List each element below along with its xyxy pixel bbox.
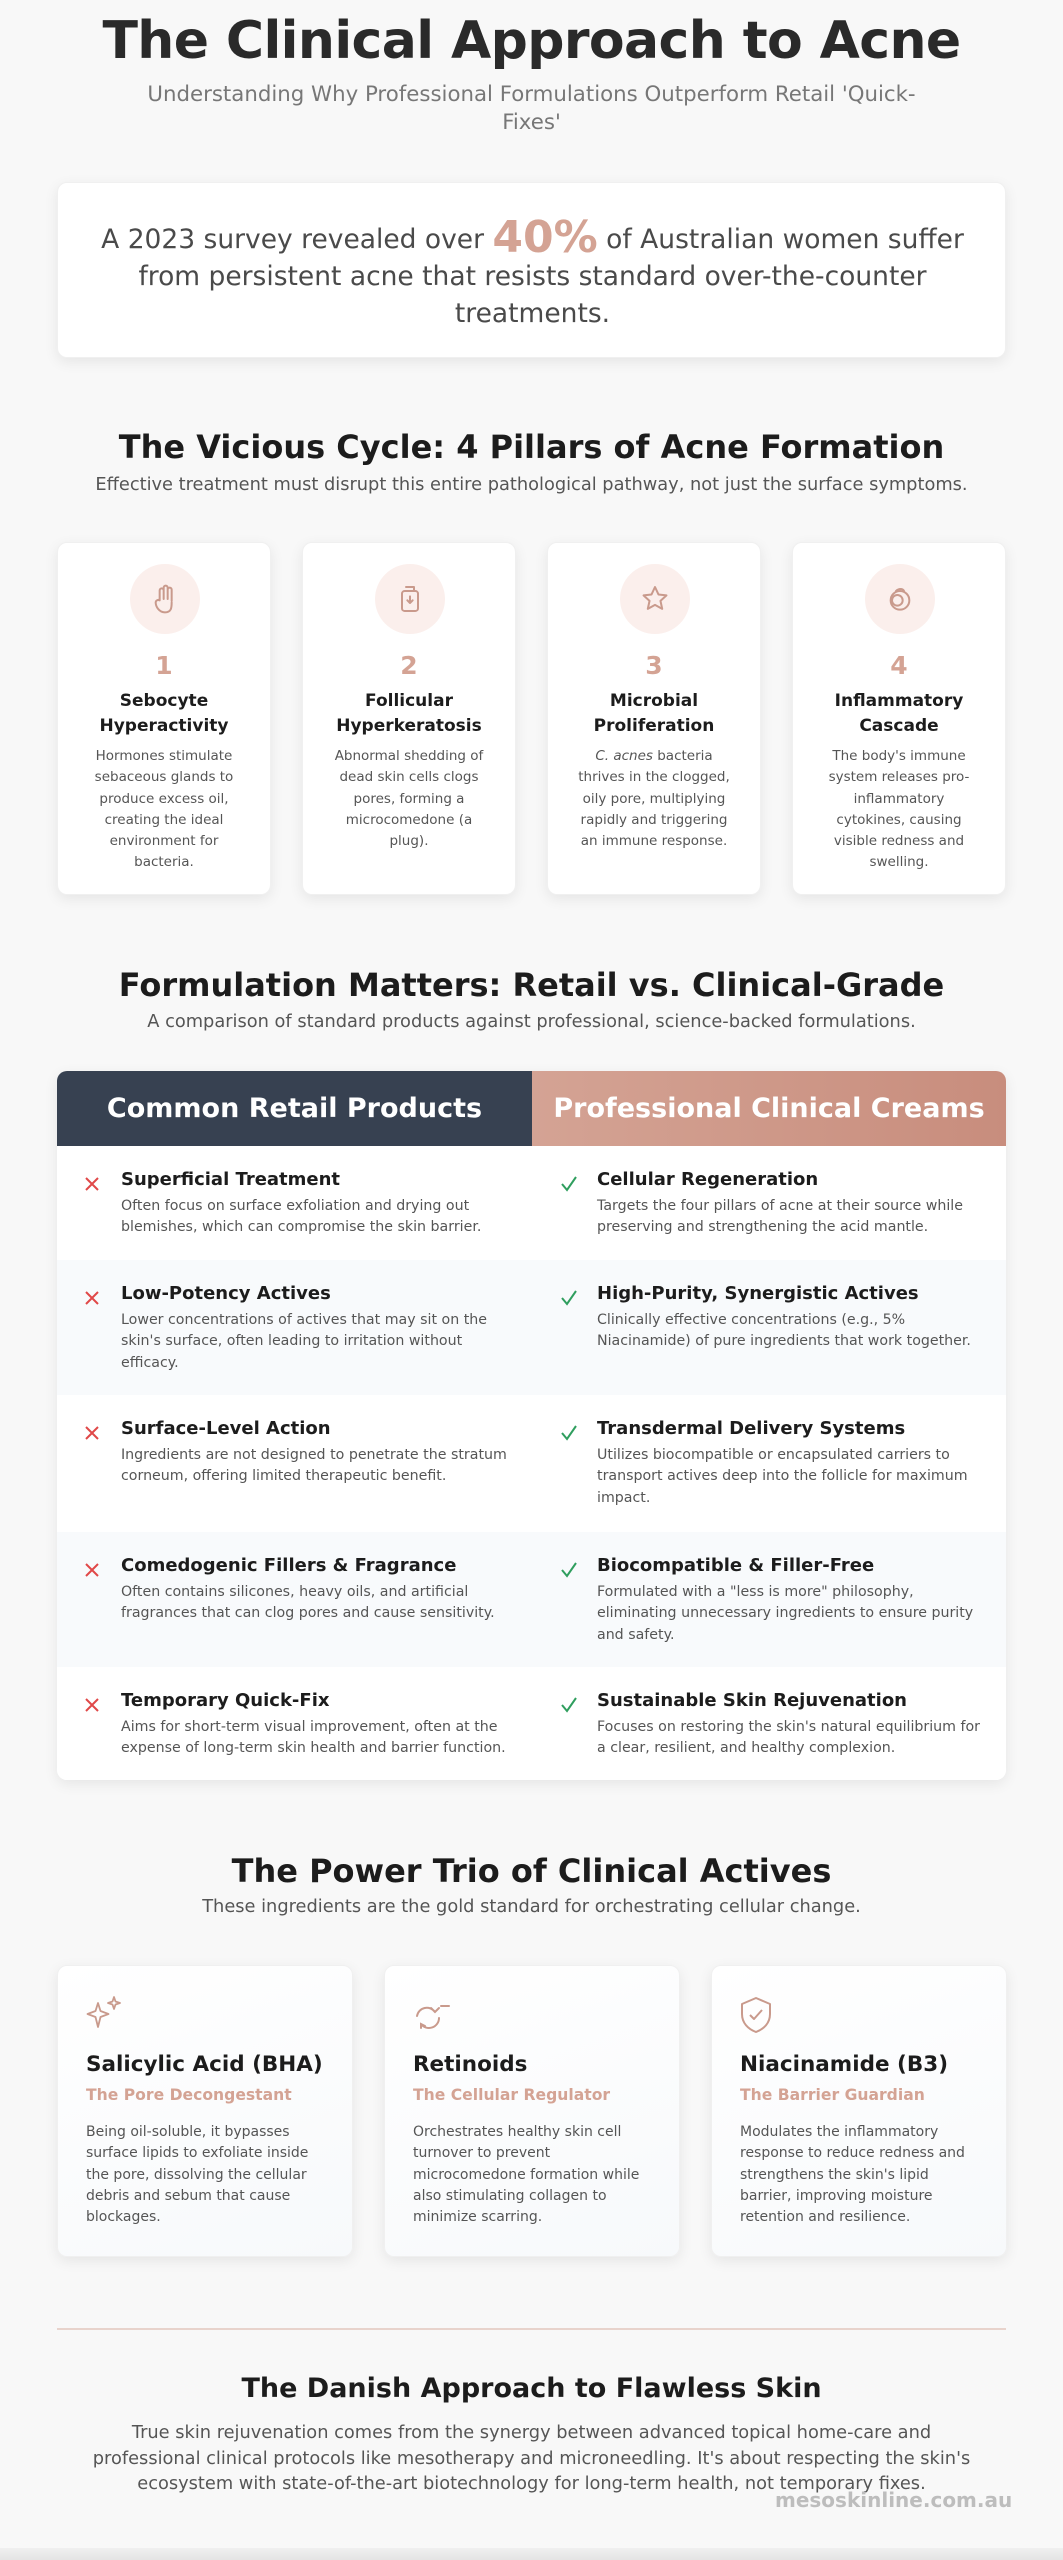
icon: check [561,1425,577,1441]
row 4: Formulated with a "less is more" philosophy, [597,1584,914,1600]
subheading: power trio: These ingredients are the gold standard for orchestrating cellular change. [202,1896,861,1917]
row 2: efficacy. [121,1355,179,1371]
panel: pillar 4: Cascade [859,716,939,736]
subtitle: Understanding Why Professional Formulations Outperform Retail 'Quick- [147,82,916,107]
row 4: Comedogenic Fillers & Fragrance [121,1555,456,1576]
panel: pillar 1: 1 [155,651,173,680]
icon: cycle [416,2005,450,2029]
row 2: skin's surface, often leading to irritation without [121,1333,462,1349]
panel: pillar 4: visible redness and [834,833,964,849]
panel: niacinamide: barrier, improving moisture [740,2188,933,2204]
panel: niacinamide: retention and resilience. [740,2209,910,2225]
row 5: Temporary Quick-Fix [121,1690,329,1711]
panel: pillar 3: an immune response. [581,833,727,849]
panel: salicylic acid: the pore, dissolving the cellular [86,2167,307,2183]
row 3: corneum, offering limited therapeutic benefit. [121,1468,446,1484]
panel: pillar 4: The body's immune [832,748,966,764]
row 2: Lower concentrations of actives that may sit on the [121,1312,487,1328]
icon: check [561,1290,577,1306]
heading: vicious cycle: The Vicious Cycle: 4 Pillars of Acne Formation [119,428,944,466]
panel: salicylic acid: The Pore Decongestant [86,2086,292,2104]
heading: danish approach: The Danish Approach to Flawless Skin [241,2373,822,2404]
panel: retinoids: minimize scarring. [413,2209,542,2225]
row 1: Cellular Regeneration [597,1169,818,1190]
row 4 [57,1532,1006,1667]
panel: pillar 2: Hyperkeratosis [336,716,482,736]
row 1: Often focus on surface exfoliation and drying out [121,1198,469,1214]
icon: cross [85,1698,99,1712]
row 4: Biocompatible & Filler-Free [597,1555,874,1576]
row 5 [57,1667,1006,1780]
row 3: impact. [597,1490,650,1506]
icon: inflammation [865,564,935,634]
row 1 [57,1146,1006,1260]
panel: salicylic acid [57,1965,353,2257]
row 3: transport actives deep into the follicle for maximum [597,1468,968,1484]
panel: retinoids: Retinoids [413,2052,527,2077]
panel: retinoids: Orchestrates healthy skin cell [413,2124,621,2140]
panel: pillar 3: Proliferation [594,716,714,736]
panel: pillar 3: rapidly and triggering [581,812,727,828]
panel: niacinamide: Modulates the inflammatory [740,2124,938,2140]
icon: cross [85,1177,99,1191]
panel: pillar 4: 4 [890,651,908,680]
closing paragraph: ecosystem with state-of-the-art biotechnology for long-term health, not temporary fixes. [137,2473,926,2494]
row 3: Surface-Level Action [121,1418,331,1439]
icon: cross [85,1426,99,1440]
panel: pillar 1: Sebocyte [120,691,208,711]
panel: pillar 2 [302,542,516,895]
comparison table [57,1071,1006,1780]
panel: salicylic acid: surface lipids to exfoliate inside [86,2145,308,2161]
row 4: and safety. [597,1627,674,1643]
row 1: preserving and strengthening the acid mantle. [597,1219,928,1235]
panel: retinoids: also stimulating collagen to [413,2188,607,2204]
row 3: Transdermal Delivery Systems [597,1418,905,1439]
row 2: Niacinamide) of pure ingredients that work together. [597,1333,971,1349]
panel: pillar 1: environment for [110,833,218,849]
panel: pillar 1: Hyperactivity [99,716,228,736]
panel: pillar 3: oily pore, multiplying [583,791,725,807]
panel: pillar 3: Microbial [610,691,698,711]
heading: power trio: The Power Trio of Clinical Actives [232,1852,831,1890]
panel: pillar 3 [547,542,761,895]
icon: star [620,564,690,634]
panel: pillar 2: microcomedone (a [346,812,472,828]
icon: check [561,1176,577,1192]
title: The Clinical Approach to Acne [102,11,961,71]
closing paragraph [93,2422,970,2494]
row 1: Superficial Treatment [121,1169,340,1190]
row 4: fragrances that can clog pores and cause sensitivity. [121,1605,495,1621]
panel: retinoids [384,1965,680,2257]
panel: pillar 1: creating the ideal [105,812,223,828]
row 4: Often contains silicones, heavy oils, and artificial [121,1584,468,1600]
panel: salicylic acid: Salicylic Acid (BHA) [86,2052,323,2077]
panel: pillar 2: dead skin cells clogs [339,769,479,785]
panel: pillar 4: Inflammatory [835,691,963,711]
closing paragraph: True skin rejuvenation comes from the synergy between advanced topical home-care and [132,2422,931,2443]
panel: pillar 1 [57,542,271,895]
header: retail: Common Retail Products [107,1093,482,1124]
row 4: eliminating unnecessary ingredients to ensure purity [597,1605,973,1621]
row 5: expense of long-term skin health and barrier function. [121,1740,506,1756]
panel: pillar 3: thrives in the clogged, [578,769,730,785]
panel: pillar 4: cytokines, causing [836,812,962,828]
panel: niacinamide [711,1965,1007,2257]
row 5: Focuses on restoring the skin's natural equilibrium for [597,1719,980,1735]
stat callout: treatments. [455,298,610,329]
panel: salicylic acid: blockages. [86,2209,161,2225]
panel: retinoids: The Cellular Regulator [413,2086,610,2104]
panel: pillar 4: swelling. [869,854,929,870]
row 3 [57,1395,1006,1532]
icon: cross [85,1291,99,1305]
row 5: a clear, resilient, and healthy complexion. [597,1740,895,1756]
panel: salicylic acid: Being oil-soluble, it bypasses [86,2124,290,2140]
stat callout: from persistent acne that resists standard over-the-counter [138,261,927,292]
icon: cross [85,1563,99,1577]
stat callout [57,182,1006,358]
panel: niacinamide: The Barrier Guardian [740,2086,925,2104]
panel: retinoids: turnover to prevent [413,2145,550,2161]
panel: pillar 2: pores, forming a [354,791,464,807]
row 2: High-Purity, Synergistic Actives [597,1283,919,1304]
icon: shield [741,1997,771,2033]
header: clinical: Professional Clinical Creams [553,1093,985,1124]
panel: pillar 2: Abnormal shedding of [335,748,483,764]
watermark: mesoskinline.com.au [775,2488,1012,2512]
panel: pillar 4 [792,542,1006,895]
row 5: Sustainable Skin Rejuvenation [597,1690,907,1711]
panel: pillar 2: Follicular [365,691,453,711]
row 5: Aims for short-term visual improvement, often at the [121,1719,498,1735]
icon: jar [375,564,445,634]
panel: pillar 2: 2 [400,651,418,680]
row 3: Ingredients are not designed to penetrate the stratum [121,1447,507,1463]
panel: pillar 4: system releases pro- [829,769,969,785]
panel: pillar 1: Hormones stimulate [96,748,232,764]
subheading: comparison: A comparison of standard products against professional, science-backed formulations. [147,1011,916,1032]
icon: check [561,1562,577,1578]
row 2: Clinically effective concentrations (e.g., 5% [597,1312,905,1328]
heading: formulation matters: Formulation Matters: Retail vs. Clinical-Grade [119,966,944,1004]
row 2 [57,1260,1006,1395]
panel: pillar 3: C. acnes bacteria [595,748,713,764]
panel: salicylic acid: debris and sebum that cause [86,2188,290,2204]
icon: sparkles [86,1996,121,2028]
panel: pillar 4: inflammatory [854,791,944,807]
stat callout: A 2023 survey revealed over 40% of Australian women suffer [101,212,964,263]
panel: retinoids: microcomedone formation while [413,2167,639,2183]
header: retail [57,1071,532,1146]
panel: pillar 1: produce excess oil, [99,791,229,807]
subtitle: Fixes' [502,110,561,135]
row 2: Low-Potency Actives [121,1283,331,1304]
closing paragraph: professional clinical protocols like mesotherapy and microneedling. It's about respecting the skin's [93,2448,970,2468]
icon: check [561,1697,577,1713]
row 1: blemishes, which can compromise the skin barrier. [121,1219,481,1235]
panel: pillar 1: sebaceous glands to [95,769,233,785]
panel: niacinamide: response to reduce redness and [740,2145,965,2161]
row 1: Targets the four pillars of acne at their source while [597,1198,963,1214]
panel: pillar 1: bacteria. [134,854,194,870]
icon: hand [130,564,200,634]
panel: pillar 3: 3 [645,651,663,680]
subheading: vicious cycle: Effective treatment must disrupt this entire pathological pathway, not just the surface symptoms. [95,474,968,495]
panel: niacinamide: strengthens the skin's lipid [740,2167,929,2183]
subtitle [147,82,916,135]
header: clinical [532,1071,1006,1146]
row 3: Utilizes biocompatible or encapsulated carriers to [597,1447,950,1463]
panel: niacinamide: Niacinamide (B3) [740,2052,948,2077]
panel: pillar 2: plug). [389,833,428,849]
